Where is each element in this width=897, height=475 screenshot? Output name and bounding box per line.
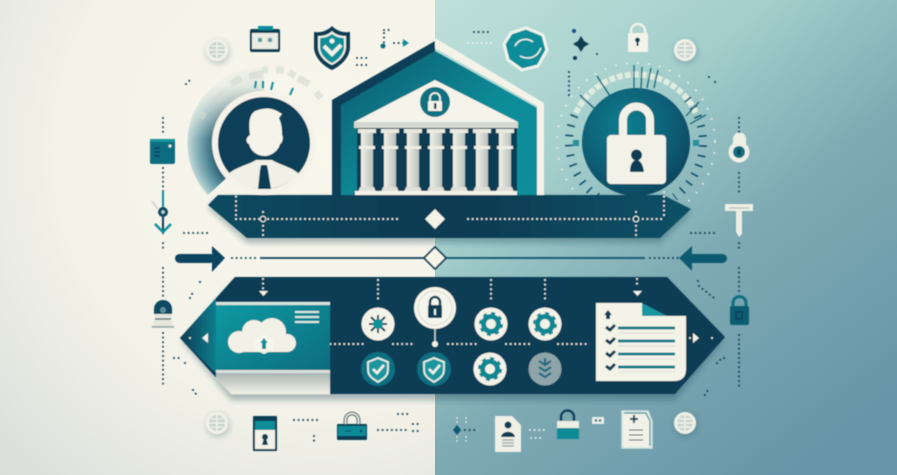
icon: small tag — [592, 417, 604, 424]
padlock emblem — [582, 88, 690, 196]
house outline — [332, 38, 544, 195]
cloud panel — [216, 302, 330, 394]
icon: top shield — [314, 26, 350, 70]
right column dots — [738, 118, 740, 386]
bank building — [354, 80, 518, 195]
menu lines — [295, 312, 319, 322]
icon: network node — [362, 308, 394, 340]
node circles — [361, 287, 562, 386]
icon: right lock — [730, 296, 749, 325]
icon: bottom form document — [622, 411, 652, 448]
padlock gauge ticks — [557, 63, 715, 221]
icon: bottom key marker — [453, 417, 478, 444]
banner and panel shadows — [182, 198, 723, 400]
centre diamond — [424, 247, 446, 269]
icon: shields — [361, 352, 451, 386]
columns — [358, 129, 514, 192]
icon: top padlock — [628, 24, 648, 52]
checklist document — [596, 303, 686, 381]
person avatar — [212, 91, 316, 195]
icon: gears — [474, 308, 562, 386]
icon: grey leaf — [528, 352, 562, 386]
icon: bottom lock right — [557, 410, 579, 439]
person gauge arcs — [186, 67, 321, 195]
icon: right ring lock — [728, 133, 750, 162]
icon: pediment lock — [420, 87, 450, 117]
icon: bottom tablet — [253, 416, 277, 451]
lower banner — [180, 277, 725, 394]
icon: bottom profile document — [495, 416, 521, 452]
dots: upper right extras — [691, 232, 716, 234]
icon: left down arrow — [152, 191, 210, 234]
left arrow — [175, 246, 425, 272]
icon: bottom globe left — [206, 412, 230, 436]
icon: right T key — [725, 204, 753, 237]
left column dots — [162, 118, 164, 388]
connector dots — [263, 279, 637, 302]
upper banner — [208, 192, 691, 238]
diamond marker — [425, 209, 445, 229]
icon: bottom globe right — [674, 412, 698, 436]
icon: central lock — [414, 287, 456, 347]
icon: left lock — [152, 300, 174, 328]
dots: right diagonal groups — [698, 281, 728, 395]
dots: bottom left — [294, 414, 419, 442]
icon: top octagon — [504, 28, 547, 70]
dots: top left cluster — [357, 30, 409, 65]
pediment — [354, 80, 518, 122]
icon: top globe left — [206, 39, 230, 64]
icon: bottom lock left — [337, 414, 367, 440]
dots: bottom right small — [530, 430, 548, 438]
icon: cloud — [228, 318, 296, 354]
icon: top globe right — [674, 39, 698, 64]
dots: left diagonal groups — [174, 282, 203, 394]
right arrow — [445, 246, 727, 271]
icon: top tablet — [250, 26, 280, 52]
icon: left card — [150, 139, 175, 164]
dots: top right cluster — [468, 29, 716, 98]
